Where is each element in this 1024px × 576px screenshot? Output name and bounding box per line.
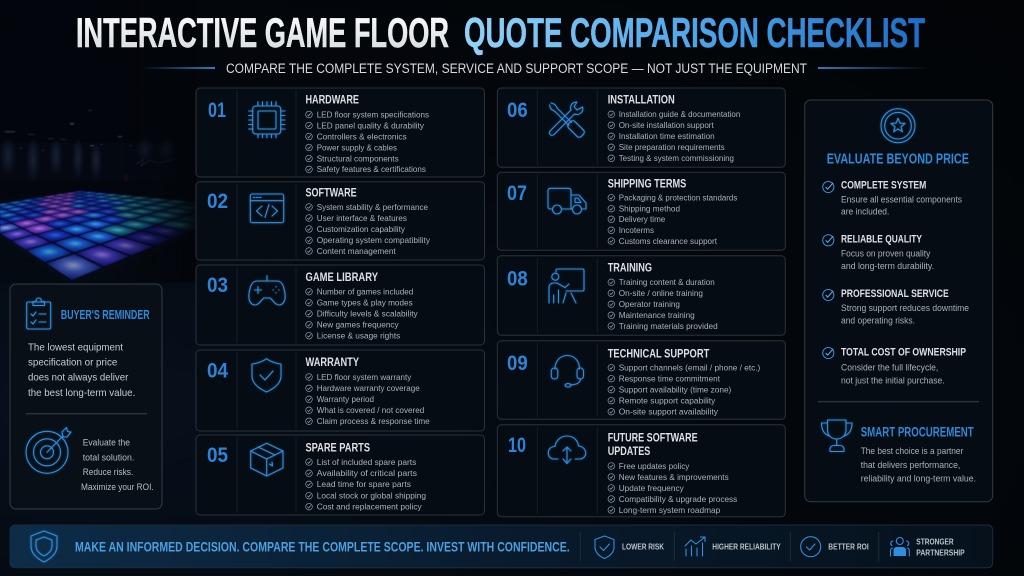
heading: HARDWARE xyxy=(306,95,359,107)
heading: TECHNICAL SUPPORT xyxy=(608,348,709,360)
checklist xyxy=(306,202,431,256)
checklist: On-site support availability xyxy=(619,406,719,416)
icon: delivery truck xyxy=(548,188,586,214)
item: reliable quality: RELIABLE QUALITY xyxy=(841,233,922,245)
icon: trophy xyxy=(822,420,852,452)
panel: 10 future software updates xyxy=(497,425,785,517)
banner message: MAKE AN INFORMED DECISION. COMPARE THE COMPLETE SCOPE. INVEST WITH CONFIDENCE. xyxy=(75,539,570,555)
title: INTERACTIVE GAME FLOOR xyxy=(76,9,449,56)
benefit: higher reliability xyxy=(685,537,781,556)
panel: buyer's reminder xyxy=(10,284,162,509)
checklist xyxy=(306,372,430,426)
text: reminder message xyxy=(28,342,135,399)
checklist: Difficulty levels & scalability xyxy=(317,308,418,318)
number 02: 02 xyxy=(207,190,228,213)
number 06: 06 xyxy=(507,99,528,122)
icon: code window xyxy=(250,194,284,223)
item: reliable quality: Focus on proven quality xyxy=(841,248,931,258)
checklist: On-site installation support xyxy=(619,120,714,130)
heading: UPDATES xyxy=(608,446,651,458)
checklist: Support availability (time zone) xyxy=(619,384,731,394)
checklist: LED panel quality & durability xyxy=(317,120,425,130)
checklist: Warranty period xyxy=(317,394,374,404)
number 03: 03 xyxy=(207,274,228,297)
item: complete system: are included. xyxy=(841,207,889,217)
text: evaluate message: Evaluate the xyxy=(83,438,130,448)
benefit: higher reliability: HIGHER RELIABILITY xyxy=(712,542,781,552)
checklist: Training materials provided xyxy=(619,321,718,331)
checklist: Free updates policy xyxy=(619,461,690,471)
benefit: better roi xyxy=(801,537,869,557)
checklist: Compatibility & upgrade process xyxy=(619,494,737,504)
checklist: Power supply & cables xyxy=(317,142,397,152)
checklist: Claim process & response time xyxy=(317,416,430,426)
checklist: Remote support capability xyxy=(619,396,716,406)
panel: 02 software xyxy=(196,182,484,260)
item: total cost of ownership: not just the initial purchase. xyxy=(841,375,945,385)
panel: 04 warranty xyxy=(196,350,484,431)
number 09: 09 xyxy=(507,352,528,375)
checklist: Operator training xyxy=(619,299,680,309)
benefit: stronger partnership: STRONGER xyxy=(916,536,954,546)
checklist: Game types & play modes xyxy=(317,298,413,308)
checklist: Local stock or global shipping xyxy=(317,490,426,500)
icon: shield check xyxy=(252,359,281,392)
checklist: LED floor system warranty xyxy=(317,372,412,382)
benefit: lower risk xyxy=(595,536,665,558)
checklist xyxy=(608,461,737,515)
heading: GAME LIBRARY xyxy=(306,272,378,284)
panel: 03 game library xyxy=(196,265,484,345)
number 01: 01 xyxy=(208,99,226,122)
number 04: 04 xyxy=(207,360,228,383)
checklist: Shipping method xyxy=(619,204,680,214)
panel: 07 shipping terms xyxy=(497,172,785,250)
number 10: 10 xyxy=(508,434,526,457)
checklist: Response time commitment xyxy=(619,374,721,384)
heading: SOFTWARE xyxy=(306,187,357,199)
photo: LED game floor in dark venue xyxy=(0,110,196,283)
heading: INSTALLATION xyxy=(608,95,675,107)
icon: clipboard checklist xyxy=(27,298,51,329)
text: evaluate message: total solution. xyxy=(83,452,134,462)
checklist: Operating system compatibility xyxy=(317,235,431,245)
number 07: 07 xyxy=(507,182,527,205)
checklist: Delivery time xyxy=(619,214,665,224)
panel: 05 spare parts xyxy=(196,435,484,515)
item: professional service: and operating risks. xyxy=(841,316,915,326)
checklist: Hardware warranty coverage xyxy=(317,383,420,393)
bottom banner xyxy=(10,525,993,568)
text: evaluate message xyxy=(81,438,154,492)
checklist: Installation guide & documentation xyxy=(619,109,740,119)
checklist: Controllers & electronics xyxy=(317,131,407,141)
checklist: Maintenance training xyxy=(619,310,695,320)
checklist xyxy=(608,362,760,416)
item: reliable quality xyxy=(823,233,934,271)
icon: chip xyxy=(249,102,285,138)
checklist xyxy=(608,192,737,246)
benefit: better roi: BETTER ROI xyxy=(828,542,869,552)
checklist: Content management xyxy=(317,246,396,256)
panel: 06 installation xyxy=(497,88,785,167)
checklist: Lead time for spare parts xyxy=(317,479,411,489)
checklist: New features & improvements xyxy=(619,472,729,482)
checklist: Structural components xyxy=(317,153,399,163)
number 08: 08 xyxy=(507,268,528,291)
item: total cost of ownership: Consider the full lifecycle, xyxy=(841,362,938,372)
item: reliable quality: and long-term durability. xyxy=(841,261,934,271)
item: complete system: Ensure all essential components xyxy=(841,194,962,204)
checklist: User interface & features xyxy=(317,213,407,223)
checklist: Safety features & certifications xyxy=(317,164,426,174)
checklist: LED floor system specifications xyxy=(317,109,429,119)
checklist: Customization capability xyxy=(317,224,406,234)
checklist: Packaging & protection standards xyxy=(619,192,737,202)
checklist xyxy=(608,277,718,331)
item: total cost of ownership: TOTAL COST OF OWNERSHIP xyxy=(841,347,966,359)
text: evaluate message: Reduce risks. xyxy=(83,467,133,477)
text: reminder message: the best long-term value. xyxy=(28,387,135,399)
icon: game controller xyxy=(249,276,285,305)
item: professional service xyxy=(823,288,969,326)
benefit: lower risk: LOWER RISK xyxy=(622,542,665,552)
panel: evaluate beyond price xyxy=(805,100,993,502)
panel: 08 training xyxy=(497,256,785,335)
checklist: Installation time estimation xyxy=(619,131,715,141)
icon: target with arrow xyxy=(26,428,71,473)
checklist: Customs clearance support xyxy=(619,236,718,246)
text: smart procurement message: reliability and long-term value. xyxy=(861,474,976,484)
icon: star badge xyxy=(881,109,915,143)
checklist: What is covered / not covered xyxy=(317,405,425,415)
checklist: Cost and replacement policy xyxy=(317,502,422,512)
heading: TRAINING xyxy=(608,263,652,275)
checklist xyxy=(306,109,429,174)
heading: evaluate beyond price: EVALUATE BEYOND PRICE xyxy=(827,151,969,167)
checklist: Update frequency xyxy=(619,483,684,493)
text: reminder message: specification or price xyxy=(28,357,117,369)
heading: SPARE PARTS xyxy=(306,442,370,454)
heading: SHIPPING TERMS xyxy=(608,178,687,190)
checklist xyxy=(306,286,418,340)
checklist: Site preparation requirements xyxy=(619,142,725,152)
text: smart procurement message xyxy=(861,446,976,484)
text: smart procurement message: that delivers performance, xyxy=(861,460,960,470)
text: evaluate message: Maximize your ROI. xyxy=(81,482,154,492)
item: total cost of ownership xyxy=(823,347,966,385)
checklist: Incoterms xyxy=(619,225,654,235)
subtitle with accent lines: COMPARE THE COMPLETE SYSTEM, SERVICE AND SUPPORT SCOPE — NOT JUST THE EQUIPMENT xyxy=(226,61,807,76)
icon: crossed tools xyxy=(550,102,586,139)
benefit: stronger partnership xyxy=(890,536,965,557)
text: smart procurement message: The best choice is a partner xyxy=(861,446,963,456)
panel: 09 technical support xyxy=(497,341,785,419)
checklist: Support channels (email / phone / etc.) xyxy=(619,362,760,372)
checklist: Number of games included xyxy=(317,286,414,296)
heading: buyer's reminder: BUYER'S REMINDER xyxy=(61,307,150,322)
icon: parcel box xyxy=(251,443,283,476)
item: professional service: Strong support reduces downtime xyxy=(841,303,969,313)
icon: headset xyxy=(551,356,584,387)
checklist: Training content & duration xyxy=(619,277,715,287)
icon: cloud sync xyxy=(548,436,586,464)
checklist: System stability & performance xyxy=(317,202,428,212)
checklist: Availability of critical parts xyxy=(317,468,417,478)
item: professional service: PROFESSIONAL SERVICE xyxy=(841,288,949,300)
item: complete system xyxy=(823,179,962,217)
checklist: License & usage rights xyxy=(317,330,400,340)
checklist: Long-term system roadmap xyxy=(619,505,721,515)
title xyxy=(76,9,925,56)
text: reminder message: The lowest equipment xyxy=(28,342,123,354)
checklist: List of included spare parts xyxy=(317,457,416,467)
checklist xyxy=(306,457,426,512)
checklist xyxy=(608,109,740,163)
item: complete system: COMPLETE SYSTEM xyxy=(841,179,926,191)
heading: WARRANTY xyxy=(306,357,359,369)
benefit: stronger partnership: PARTNERSHIP xyxy=(916,547,965,557)
panel: 01 hardware xyxy=(196,88,484,177)
heading: FUTURE SOFTWARE xyxy=(608,433,698,445)
icon: trainer at board xyxy=(549,269,584,303)
heading xyxy=(608,433,698,458)
heading: smart procurement: SMART PROCUREMENT xyxy=(861,425,974,440)
number 05: 05 xyxy=(207,444,228,467)
checklist: New games frequency xyxy=(317,320,399,330)
text: reminder message: does not always deliver xyxy=(28,372,129,384)
checklist: On-site / online training xyxy=(619,288,703,298)
checklist: Testing & system commissioning xyxy=(619,153,734,163)
icon: double shield xyxy=(31,531,57,562)
